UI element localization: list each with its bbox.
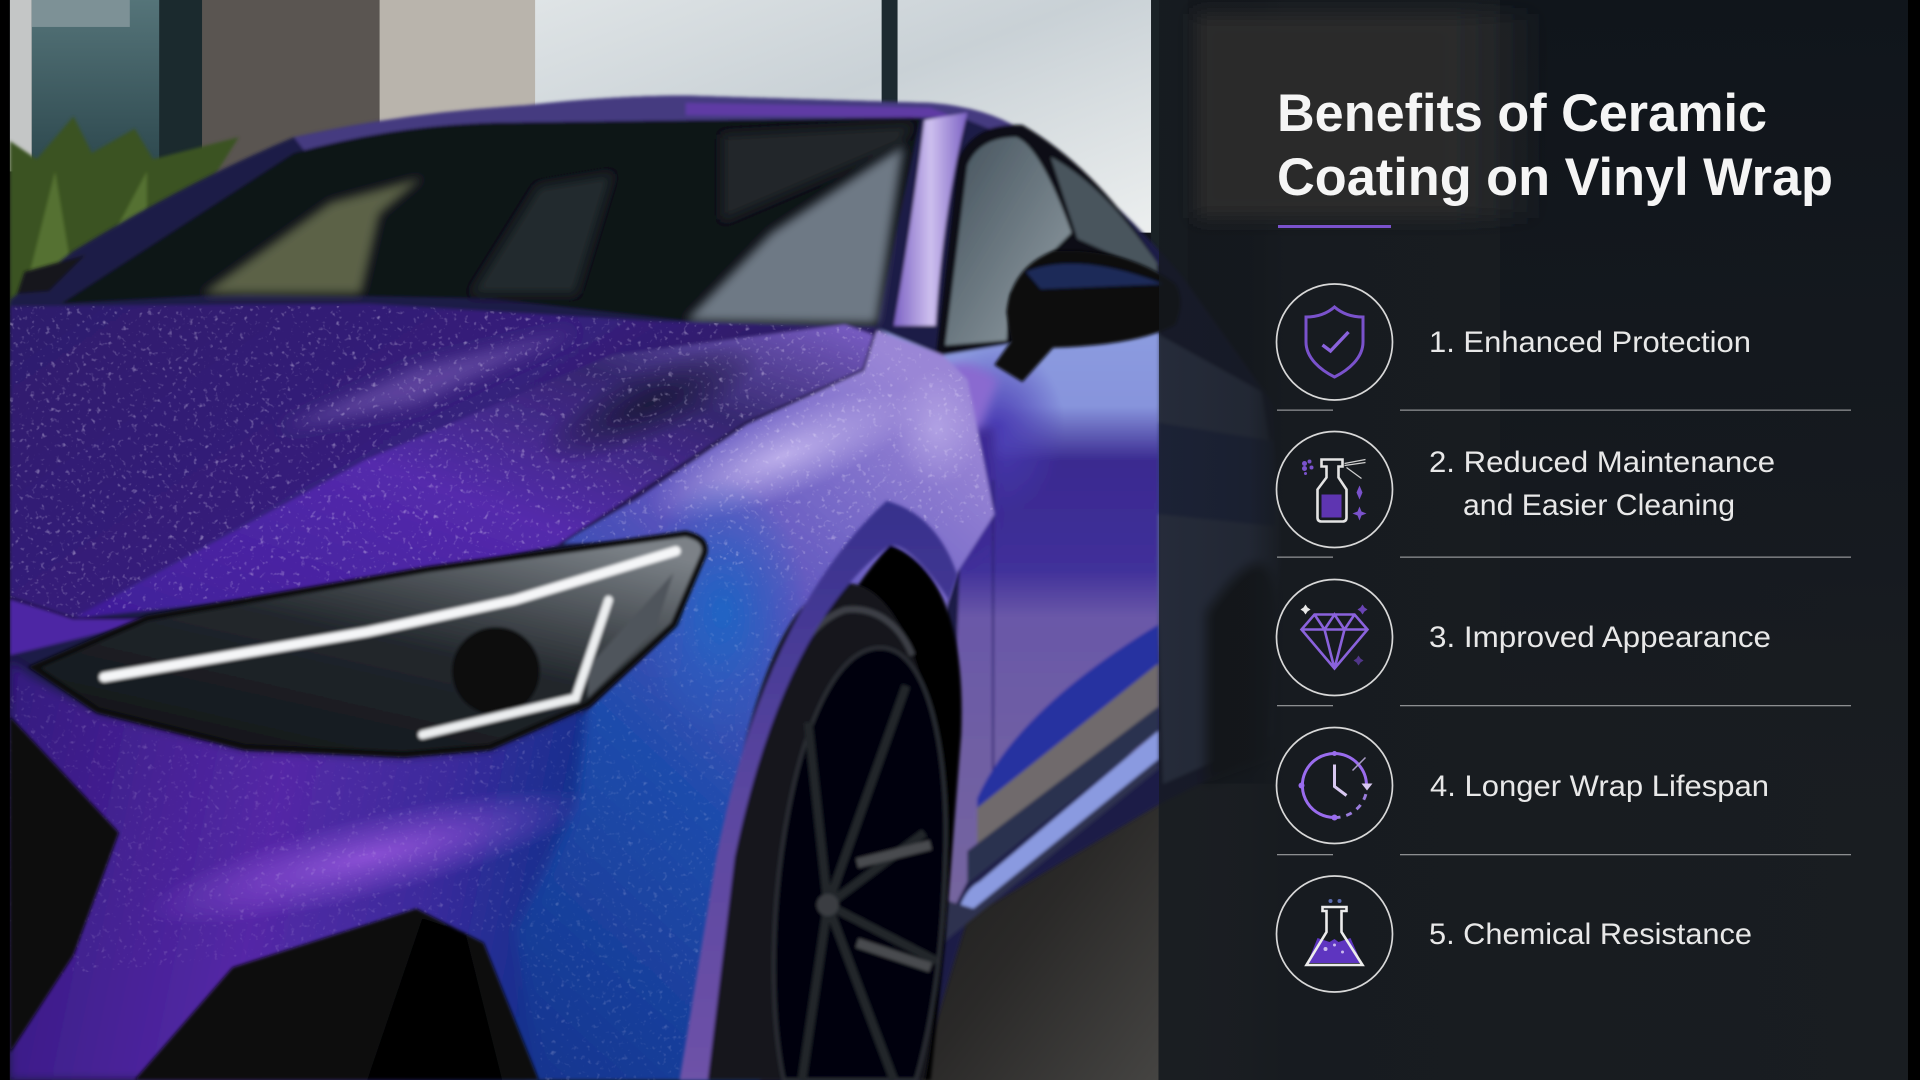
icon: spray bottle <box>1276 432 1392 548</box>
side window <box>945 137 1071 345</box>
windshield reflections <box>202 178 422 294</box>
tire tread highlight <box>747 609 912 784</box>
item 2: reduced maintenance <box>1276 432 1775 548</box>
spokes <box>802 686 937 1080</box>
fender arch lip <box>680 501 958 1080</box>
daytime running light <box>104 551 676 677</box>
lower sill <box>943 759 1158 943</box>
divider 2 <box>1277 556 1851 558</box>
divider 1 <box>1277 410 1851 411</box>
title: Coating on Vinyl Wrap <box>1277 148 1833 207</box>
icon: clock <box>1276 728 1392 844</box>
side mirror left <box>17 255 86 294</box>
bumper highlight <box>132 760 603 954</box>
arch interior <box>722 545 962 1080</box>
title: Benefits of Ceramic <box>1277 84 1767 143</box>
panel wall reflection <box>1195 14 1535 218</box>
side sill <box>960 731 1158 909</box>
icon: flask <box>1276 876 1392 992</box>
door front indigo <box>931 416 994 576</box>
windshield <box>61 118 921 326</box>
door <box>877 328 1158 931</box>
fender highlights <box>632 362 936 549</box>
door purple reflection <box>931 343 1065 514</box>
item 4: longer wrap lifespan <box>1276 728 1769 844</box>
bumper <box>10 661 588 1080</box>
wheel, mirror and lights <box>10 251 1180 1080</box>
hood dark patch <box>522 321 776 487</box>
A pillar <box>894 113 967 326</box>
door dark strip <box>967 707 1158 884</box>
hood shut line <box>10 331 876 618</box>
hood bright band <box>73 324 874 618</box>
panel right shading <box>1500 0 1908 900</box>
panel background <box>1159 0 1908 1080</box>
item 5: chemical resistance <box>1276 876 1752 992</box>
divider 4 <box>1277 854 1851 855</box>
car body <box>10 96 1283 1080</box>
roof edge <box>294 96 1065 159</box>
item 3: improved appearance <box>1276 580 1771 696</box>
label 3: 3. Improved Appearance <box>1429 621 1771 654</box>
window surround <box>936 125 1161 367</box>
title underline <box>1278 225 1391 228</box>
label 4: 4. Longer Wrap Lifespan <box>1430 770 1769 803</box>
title <box>1277 84 1833 207</box>
label 2: 2. Reduced Maintenance <box>1429 446 1775 479</box>
label 2 <box>1429 446 1775 522</box>
car silhouette <box>10 96 1283 1080</box>
hood <box>10 304 876 618</box>
door shut line <box>992 480 994 786</box>
item 1: enhanced protection <box>1276 284 1751 400</box>
rim <box>774 648 946 1080</box>
icon: diamond <box>1276 580 1392 696</box>
fender <box>465 331 994 1080</box>
divider 3 <box>1277 705 1851 706</box>
hood streak <box>282 331 576 429</box>
car rear side <box>1151 331 1281 784</box>
tire <box>700 583 942 1080</box>
headlight <box>34 534 705 754</box>
label 5: 5. Chemical Resistance <box>1429 918 1752 951</box>
label 1: 1. Enhanced Protection <box>1429 326 1751 359</box>
icon: shield <box>1276 284 1392 400</box>
water droplets: hood <box>10 306 1002 624</box>
photo: purple wrapped car <box>10 0 1275 1080</box>
door beige strip <box>977 664 1158 847</box>
fender azure <box>637 478 808 747</box>
door blue strip <box>977 624 1158 808</box>
rear side window <box>1051 157 1157 276</box>
mirror <box>994 251 1180 382</box>
plant <box>10 116 239 306</box>
lower intake <box>135 909 539 1080</box>
door lavender reflection <box>924 363 998 441</box>
grille <box>10 716 119 1053</box>
headlight lens <box>452 627 540 715</box>
water droplets: lower body <box>10 527 867 1080</box>
label 2: and Easier Cleaning <box>1463 489 1735 522</box>
left purple nose <box>10 600 159 655</box>
